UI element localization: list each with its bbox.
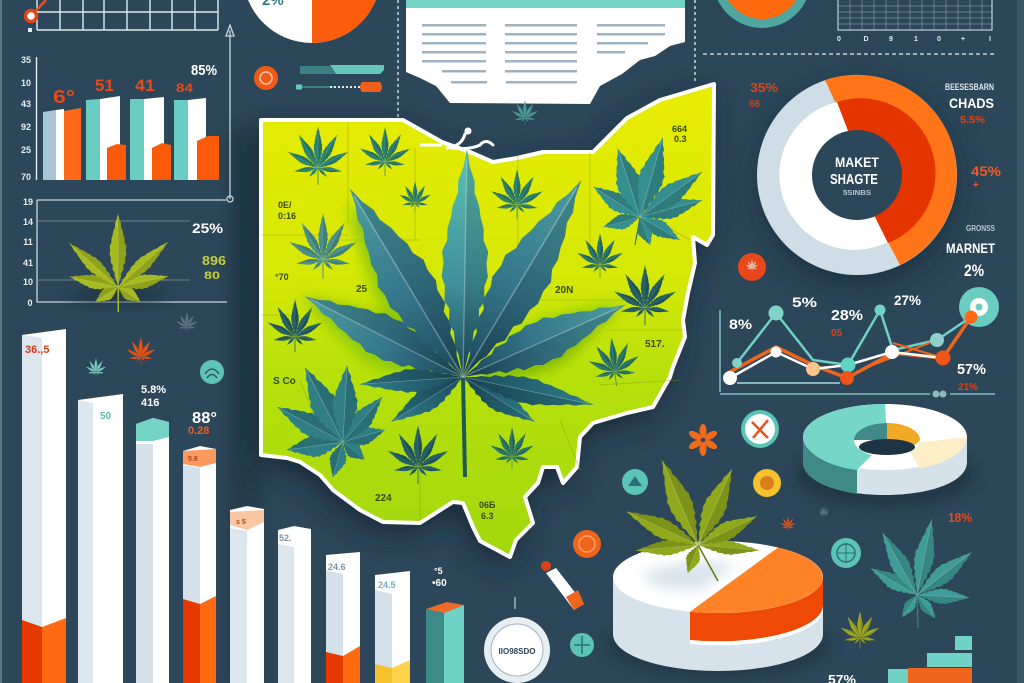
icon: yellow badge	[753, 469, 781, 497]
axis labels: 25	[21, 145, 31, 155]
map labels: 224	[375, 493, 392, 504]
donut labels: GRONSS	[966, 224, 996, 233]
river detail	[420, 128, 493, 149]
map labels: 25	[356, 284, 368, 295]
lower right labels	[828, 510, 972, 683]
lower right labels: 18%	[948, 510, 972, 525]
donut centre label	[830, 154, 879, 197]
pie chart, top	[243, 0, 381, 43]
map labels: °70	[275, 272, 289, 282]
small icons, left	[85, 66, 278, 384]
small bar stack, lower right	[888, 636, 972, 683]
donut labels: 35%	[750, 80, 778, 95]
icon: orange flower	[126, 337, 156, 365]
small icons, lower centre	[541, 410, 861, 657]
map labels: 0E/	[278, 200, 292, 210]
icon: green leaf, left chart	[64, 213, 173, 312]
chart frame lines	[37, 25, 234, 302]
bar value labels: s 5	[236, 519, 246, 526]
cake pie chart, 3D	[606, 541, 830, 677]
bar value labels	[141, 384, 447, 590]
grid axis labels: D	[863, 36, 869, 43]
line chart	[720, 287, 999, 398]
bar 7	[326, 552, 360, 683]
axis labels, lower left chart: 41	[23, 258, 33, 268]
donut labels: 5.5%	[960, 115, 985, 126]
donut chart: market share	[757, 75, 958, 286]
small leaves on map	[266, 126, 678, 484]
bar 5	[230, 506, 264, 683]
bar 4	[183, 446, 216, 683]
map labels: 06Ƃ	[479, 500, 496, 510]
bar 2: 50	[100, 411, 112, 422]
text card, top centre	[406, 0, 685, 104]
percent label: 85%	[191, 62, 217, 79]
grid panel, top right	[837, 0, 992, 43]
left chart labels: 80	[204, 270, 220, 282]
map labels: 6.3	[481, 511, 494, 521]
donut labels: MARNET	[946, 240, 995, 256]
line grid chart, top left	[26, 0, 218, 32]
axis labels, lower left chart: 0	[27, 298, 33, 308]
axis labels, lower left chart	[23, 197, 33, 308]
large teal leaf, upper right of map	[588, 134, 708, 248]
round label	[484, 597, 550, 683]
axis labels	[21, 55, 31, 182]
donut labels: BEESESBARN	[945, 82, 994, 92]
icon: grey star	[176, 312, 198, 333]
icon: teal sprig	[85, 358, 107, 378]
line chart labels	[729, 292, 986, 393]
value labels: 51	[95, 76, 114, 95]
bar value labels: 416	[141, 397, 159, 409]
value labels	[53, 76, 193, 107]
line chart labels: 5%	[792, 294, 818, 310]
donut labels	[749, 80, 1002, 280]
dashed dividers	[398, 0, 995, 117]
series: teal	[737, 287, 999, 365]
donut labels: +	[973, 180, 979, 191]
bar 9	[426, 602, 464, 683]
grid axis labels	[837, 36, 991, 43]
map labels: 20N	[555, 285, 573, 296]
bar value labels: 24.6	[328, 562, 346, 572]
text lines	[422, 24, 665, 84]
icon: teal badge	[200, 360, 224, 384]
grid axis labels: +	[961, 36, 965, 43]
value labels: 6°	[53, 87, 75, 107]
bar value labels: 5.6	[188, 456, 198, 463]
icon: small orange leaf	[780, 516, 796, 531]
bar 6	[278, 526, 311, 683]
icon: olive small leaf	[839, 611, 881, 649]
large teal leaf, lower left of map	[272, 361, 390, 480]
ring chart, 3D	[795, 404, 975, 507]
value labels: 41	[135, 76, 155, 95]
icon: teal leaf, lower right	[866, 517, 978, 628]
bar value labels: 0.28	[188, 425, 209, 437]
bar value labels: °5	[434, 566, 443, 576]
donut labels: 2%	[964, 261, 984, 280]
small slider bars	[296, 65, 384, 92]
grid axis labels: I	[989, 36, 991, 43]
map labels: 517.	[645, 339, 665, 350]
bar value labels: 24.5	[378, 580, 396, 590]
grid axis labels: 1	[914, 36, 918, 43]
bar value labels: •60	[432, 578, 447, 589]
icon: orange badge	[573, 530, 601, 558]
donut labels: 45%	[971, 163, 1002, 179]
leaf shadow	[286, 186, 639, 407]
bars	[43, 96, 219, 180]
line chart labels: 8%	[729, 316, 753, 332]
bar 2	[78, 394, 123, 683]
axis labels, lower left chart: 19	[23, 197, 33, 207]
map labels: S Co	[273, 376, 296, 387]
icon: grey snowflake	[818, 506, 830, 517]
axis labels: 92	[21, 122, 31, 132]
icon: teal badge	[622, 469, 648, 495]
axis labels, lower left chart: 10	[23, 277, 33, 287]
line chart labels: 21%	[958, 382, 978, 393]
axis labels, lower left chart: 11	[23, 237, 33, 247]
map of Ohio	[257, 84, 714, 567]
left chart labels: 25%	[192, 220, 224, 236]
value labels: 84	[176, 81, 193, 95]
donut centre label: 5SINBS	[843, 190, 871, 197]
icon: orange flower badge	[738, 253, 766, 281]
icon: orange flower	[687, 424, 719, 456]
axis labels: 35	[21, 55, 31, 65]
icon: cannabis leaf on pie	[621, 455, 761, 581]
map labels: 0.3	[674, 134, 687, 144]
axis labels: 70	[21, 172, 31, 182]
icon: orange badge	[254, 66, 278, 90]
bar 8	[375, 571, 410, 683]
county lines	[262, 122, 690, 520]
data points	[723, 304, 978, 398]
grid axis labels: 0	[937, 36, 941, 43]
donut centre label: MAKET	[835, 154, 879, 170]
donut labels: 66	[749, 99, 761, 110]
axis labels: 43	[21, 99, 31, 109]
icon: capsule	[541, 561, 584, 610]
series: white	[730, 352, 943, 378]
grid axis labels: 0	[837, 36, 841, 43]
icon: teal badge	[570, 633, 594, 657]
donut centre label: SHAGTE	[830, 171, 878, 188]
gauge circle, top right	[713, 0, 811, 28]
bar 1: 36.,5	[25, 344, 49, 356]
map labels: 664	[672, 124, 687, 134]
bar chart, top left	[21, 55, 219, 182]
icon: teal rosette	[831, 538, 861, 568]
left chart labels	[192, 220, 226, 282]
grid axis labels: 9	[889, 36, 893, 43]
round label: IIO98SDO	[499, 647, 535, 656]
donut labels: CHADS	[949, 95, 994, 111]
series: orange	[728, 317, 971, 378]
icon: white teal badge	[741, 410, 779, 448]
map labels	[273, 124, 687, 521]
line chart labels: 05	[831, 328, 843, 339]
map labels: 0:16	[278, 211, 296, 221]
left chart labels: 896	[202, 253, 226, 268]
line chart labels: 57%	[957, 361, 986, 378]
tall bar chart, bottom left	[22, 329, 464, 683]
icon: small sprig under card	[511, 100, 539, 125]
axis labels, lower left chart: 14	[23, 217, 33, 227]
bar 3	[136, 418, 169, 683]
bar value labels: 5.8%	[141, 384, 166, 396]
bar value labels: 52.	[279, 533, 292, 543]
bar 1	[22, 329, 66, 683]
line chart labels: 27%	[894, 292, 922, 308]
line chart labels: 28%	[831, 307, 863, 324]
large central leaf	[286, 149, 639, 477]
bar value labels: 88°	[192, 410, 217, 427]
axis labels: 10	[21, 78, 31, 88]
